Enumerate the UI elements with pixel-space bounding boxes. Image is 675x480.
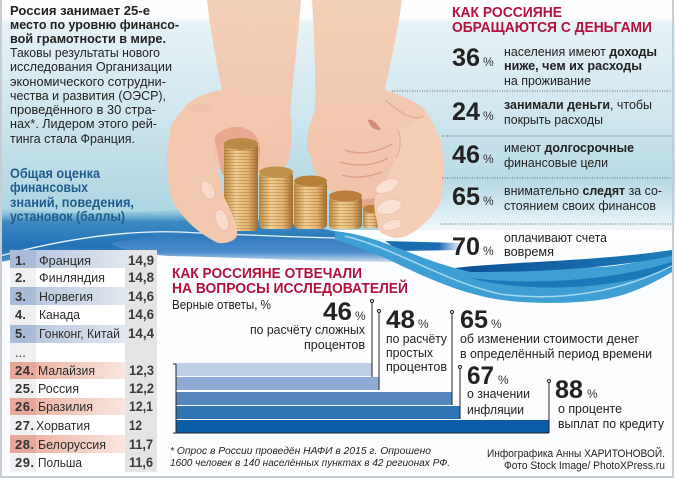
table rows: 2. xyxy=(15,270,26,285)
panel: how Russians handle money xyxy=(392,5,672,261)
icon: right arm and palm xyxy=(307,0,430,202)
intro bold lead: Россия занимает 25-е xyxy=(10,3,150,18)
table rows xyxy=(15,253,154,470)
label: 46%: по расчёту сложных xyxy=(250,322,365,337)
label: 48%: % xyxy=(418,317,429,331)
coin stack 4 xyxy=(329,190,362,229)
stat: 24%: 24 xyxy=(452,98,480,126)
table rows: 12,1 xyxy=(129,399,153,414)
table rows: 24. xyxy=(15,363,34,378)
table rows: Гонконг, Китай xyxy=(39,326,120,341)
chart heading: КАК РОССИЯНЕ ОТВЕЧАЛИ xyxy=(172,266,362,282)
label: 65%: об изменении стоимости денег xyxy=(460,331,639,346)
label: 67%: инфляции xyxy=(467,402,524,417)
footnote: * Опрос в России проведён НАФИ в 2015 г. Опрошено xyxy=(170,445,431,457)
label: 67%: 67 xyxy=(467,362,494,390)
ranking heading: знаний, поведения, xyxy=(10,195,134,210)
label: 67%: о значении xyxy=(467,386,530,401)
label: 48%: по расчёту xyxy=(386,331,447,346)
intro bold lead: место по уровню финансо- xyxy=(10,17,179,32)
ranking heading: Общая оценка xyxy=(10,166,100,181)
label: 65%: 65 xyxy=(460,306,488,334)
table backing xyxy=(10,250,157,472)
stat: 70%: оплачивают счета xyxy=(504,230,608,245)
footnote: 1600 человек в 140 населённых пунктах в 42 регионах РФ. xyxy=(170,457,450,469)
label: 88% xyxy=(555,376,664,431)
background sky xyxy=(0,0,675,230)
label: 88%: выплат по кредиту xyxy=(558,416,664,431)
footnote xyxy=(170,445,450,469)
table rows: 12,3 xyxy=(129,363,154,378)
ranking heading: установок (баллы) xyxy=(10,209,125,224)
table rows: Бразилия xyxy=(38,399,93,414)
left finger details xyxy=(188,104,231,232)
wave: main swoosh xyxy=(335,231,672,303)
label: 65% xyxy=(460,306,652,361)
table rows: 11,6 xyxy=(129,455,153,470)
icon: left arm and palm xyxy=(205,0,301,176)
table rows: 14,8 xyxy=(128,270,154,285)
coin stack 5 xyxy=(363,205,379,228)
wave: dark strip xyxy=(385,241,462,251)
stat: 46%: % xyxy=(483,152,494,166)
panel: answers to researchers xyxy=(172,266,664,433)
stat: 46%: имеют долгосрочные xyxy=(504,140,634,155)
stat: 70%: % xyxy=(483,244,494,258)
intro body: экономического сотрудни- xyxy=(10,74,166,89)
panel heading xyxy=(452,5,652,36)
label: 88%: о проценте xyxy=(558,401,622,416)
stat: 65%: 65 xyxy=(452,183,480,211)
wave: navy stripe xyxy=(455,250,672,272)
wave: soft highlight xyxy=(345,236,672,297)
intro body: чества и развития (ОЭСР), xyxy=(10,88,166,103)
chart subtitle: Верные ответы, % xyxy=(172,297,271,312)
stat: 70% xyxy=(452,230,608,261)
stat: 70%: вовремя xyxy=(504,244,554,259)
table rows: 14,4 xyxy=(128,326,154,341)
label: 48%: простых xyxy=(386,345,433,360)
stat: 65%: стоянием своих финансов xyxy=(504,198,656,213)
wave: lower ripple xyxy=(110,234,400,262)
table rows: 5. xyxy=(15,326,26,341)
wave: lower stripe xyxy=(470,262,672,287)
wave: white streak xyxy=(0,232,400,256)
table rows: ... xyxy=(15,345,26,360)
table rows: Польша xyxy=(38,455,83,470)
chart heading: НА ВОПРОСЫ ИССЛЕДОВАТЕЛЕЙ xyxy=(172,279,408,297)
coin stack 1 xyxy=(224,138,258,231)
waves band xyxy=(0,208,672,303)
left intro text xyxy=(10,3,179,146)
right sky fade xyxy=(380,180,675,240)
table rows: 14,9 xyxy=(128,253,154,268)
table rows: Малайзия xyxy=(38,363,95,378)
table rows: Финляндия xyxy=(39,270,105,285)
intro body: тинга стала Франция. xyxy=(10,131,135,146)
stat: 65% xyxy=(452,183,662,213)
ranking table xyxy=(10,250,157,472)
bar chart xyxy=(173,300,550,433)
intro body: Таковы результаты нового xyxy=(10,45,160,60)
label: 65%: в определённый период времени xyxy=(460,346,652,361)
credits: Инфографика Анны ХАРИТОНОВОЙ. xyxy=(487,447,665,460)
stat: 36%: населения имеют доходы xyxy=(504,44,657,59)
stat: 46%: финансовые цели xyxy=(504,155,608,170)
stat: 46%: 46 xyxy=(452,141,480,169)
intro body: проведённого в 30 стра- xyxy=(10,102,156,117)
label: 46%: 46 xyxy=(323,298,352,326)
label: 46% xyxy=(250,298,366,352)
stat: 24%: покрыть расходы xyxy=(504,112,603,127)
table rows: 12,2 xyxy=(129,381,154,396)
label: 65%: % xyxy=(491,317,502,331)
intro body: нах*. Лидером этого рей- xyxy=(10,116,157,131)
right finger details xyxy=(374,175,403,232)
intro bold lead xyxy=(10,3,179,46)
stat: 36% xyxy=(452,44,657,88)
table rows: 14,6 xyxy=(128,307,154,322)
credits: Фото Stock Image/ PhotoXPress.ru xyxy=(504,460,665,472)
intro body: исследования Организации xyxy=(10,59,172,74)
panel heading: КАК РОССИЯНЕ xyxy=(452,5,562,21)
label: 48%: 48 xyxy=(386,306,415,334)
stat: 46% xyxy=(452,140,634,170)
table rows: 29. xyxy=(15,455,34,470)
stat: 65%: % xyxy=(483,194,494,208)
palm shadows xyxy=(214,120,392,210)
wave: left band xyxy=(0,208,400,262)
intro body xyxy=(10,45,172,146)
coin stack 3 xyxy=(294,176,327,229)
stat: 24%: занимали деньги, чтобы xyxy=(504,97,652,112)
panel heading: ОБРАЩАЮТСЯ С ДЕНЬГАМИ xyxy=(452,20,652,36)
table row bands xyxy=(10,250,157,472)
table rows: Норвегия xyxy=(39,289,93,304)
stat: 36%: ниже, чем их расходы xyxy=(504,58,642,73)
intro bold lead: вой грамотности в мире. xyxy=(10,31,166,46)
label: 48%: процентов xyxy=(386,359,447,374)
table rows: Канада xyxy=(39,307,81,322)
chart heading xyxy=(172,266,408,297)
label: 46%: % xyxy=(355,309,366,323)
table rows: Белоруссия xyxy=(38,437,106,452)
stat: 70%: 70 xyxy=(452,233,480,261)
table rows: 27. xyxy=(15,418,34,433)
table rows: Россия xyxy=(38,381,79,396)
stat: 36%: 36 xyxy=(452,44,480,72)
illustration: hands holding coin stacks xyxy=(167,0,444,243)
table rows: 14,6 xyxy=(128,289,154,304)
label: 46%: процентов xyxy=(304,337,365,352)
table rows: Хорватия xyxy=(36,418,90,433)
credits xyxy=(487,447,665,472)
table rows: 12 xyxy=(129,418,142,433)
icon: left hand fingers xyxy=(167,90,283,243)
label: 88%: 88 xyxy=(555,376,583,404)
table rows: 28. xyxy=(15,437,34,452)
stat: 24%: % xyxy=(483,109,494,123)
ranking heading xyxy=(10,166,134,224)
table rows: Франция xyxy=(39,253,91,268)
label: 48% xyxy=(386,306,447,374)
table rows: 11,7 xyxy=(129,437,153,452)
ranking heading: финансовых xyxy=(10,180,88,195)
label: 67%: % xyxy=(498,373,509,387)
label: 67% xyxy=(467,362,530,417)
stat: 36%: % xyxy=(483,55,494,69)
coin stack 2 xyxy=(259,166,293,229)
table rows: 1. xyxy=(15,253,26,268)
stat: 36%: на проживание xyxy=(504,73,591,88)
stat: 65%: внимательно следят за со- xyxy=(504,183,662,198)
lower white panel xyxy=(0,240,675,480)
stat: 24% xyxy=(452,97,652,127)
table rows: 26. xyxy=(15,399,34,414)
right thumb crease xyxy=(385,100,424,158)
table rows: 25. xyxy=(15,381,34,396)
icon: right hand fingers xyxy=(374,110,444,238)
table rows: 4. xyxy=(15,307,26,322)
label: 88%: % xyxy=(587,387,598,401)
table rows: 3. xyxy=(15,289,26,304)
